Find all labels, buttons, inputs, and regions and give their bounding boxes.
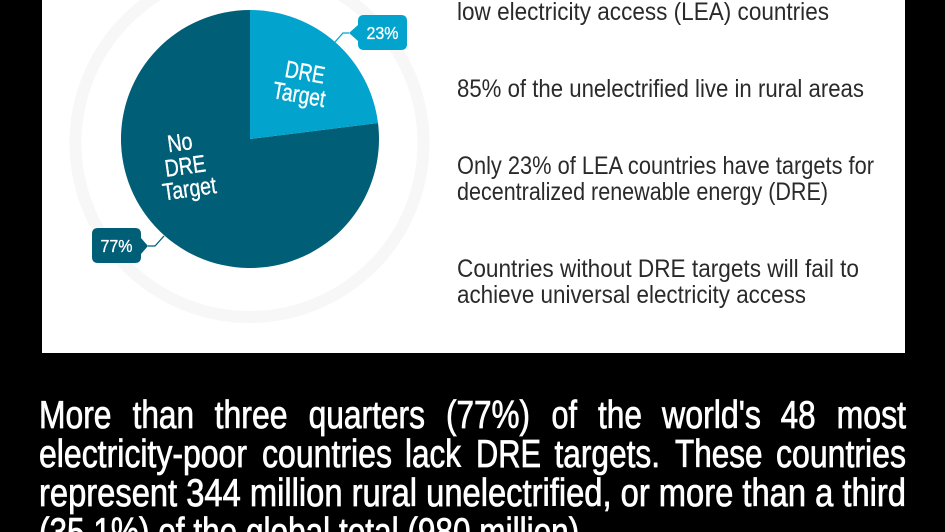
- slice label: DRE Target: DRE: [283, 56, 327, 90]
- text block: key facts: Countries without DRE targets will fail to: [457, 255, 859, 283]
- text block: summary paragraph: of: [552, 394, 577, 437]
- decorative ring around pie: [76, 0, 424, 317]
- text block: summary paragraph: lack: [405, 433, 462, 476]
- text block: summary paragraph: (77%): [446, 394, 530, 437]
- panel: white chart and facts card: [42, 0, 905, 353]
- text block: summary paragraph: than: [133, 394, 194, 437]
- text block: summary paragraph: [39, 394, 906, 532]
- slice label: No DRE Target: DRE: [163, 150, 207, 183]
- text block: key facts: [457, 0, 874, 309]
- slice label: DRE Target: [271, 55, 332, 113]
- text block: summary paragraph: three: [215, 394, 288, 437]
- text block: summary paragraph: 48: [781, 394, 816, 437]
- text block: summary paragraph: most: [837, 394, 906, 437]
- text block: key facts: achieve universal electricity access: [457, 281, 806, 309]
- slice label: No DRE Target: Target: [161, 172, 218, 206]
- callout: 23%: [335, 15, 407, 50]
- text block: key facts: 85% of the unelectrified live in rural areas: [457, 75, 864, 103]
- text block: summary paragraph: More: [39, 394, 112, 437]
- slice label: No DRE Target: [154, 126, 218, 206]
- text block: summary paragraph: quarters: [309, 394, 425, 437]
- callout: 23%: 23%: [366, 23, 398, 43]
- text block: key facts: Only 23% of LEA countries have targets for: [457, 152, 874, 180]
- text block: summary paragraph: countries: [262, 433, 392, 476]
- text block: key facts: decentralized renewable energy (DRE): [457, 178, 828, 206]
- slice: no DRE target 77%: [121, 10, 379, 268]
- text block: summary paragraph: DRE: [476, 433, 541, 476]
- callout: 77%: [92, 228, 164, 263]
- pie chart: DRE target share: [121, 10, 379, 268]
- callout: 77%: 77%: [100, 236, 132, 256]
- text block: summary paragraph: electricity-poor: [39, 433, 247, 476]
- text block: summary paragraph: targets.: [554, 433, 660, 476]
- text block: summary paragraph: world's: [661, 394, 761, 437]
- text block: summary paragraph: These: [675, 433, 762, 476]
- text block: summary paragraph: countries: [776, 433, 906, 476]
- slice label: No DRE Target: No: [166, 128, 194, 158]
- slice label: DRE Target: Target: [271, 77, 328, 113]
- slice: DRE target 23%: [250, 10, 378, 139]
- text block: summary paragraph: the: [598, 394, 642, 437]
